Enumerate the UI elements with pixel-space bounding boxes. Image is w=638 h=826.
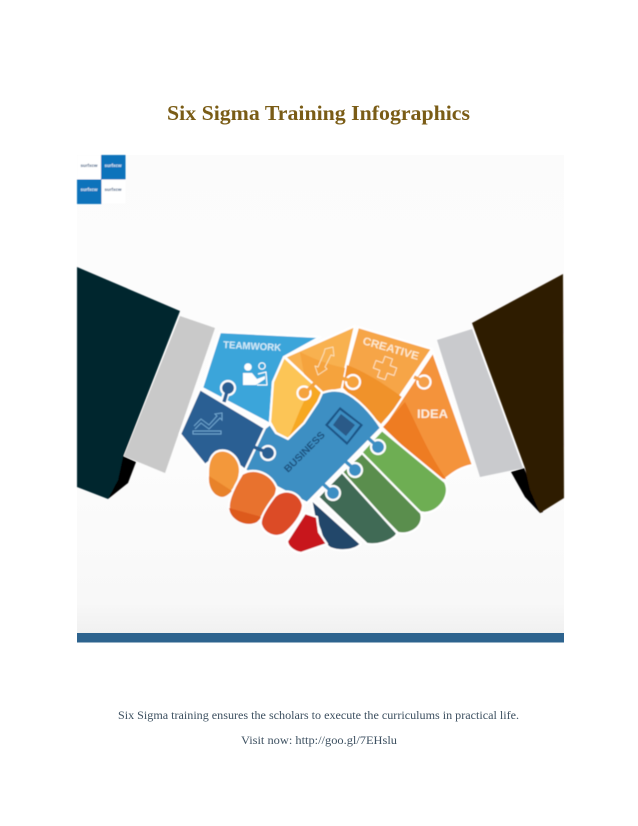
panel: handshake image [77,155,564,642]
finger: orange [208,450,240,497]
bottom bar [77,633,564,642]
tabs: blue knobs in green fingers [323,438,385,500]
logo [77,155,126,204]
piece: creative: CREATIVE [361,335,420,363]
icon: arrows [315,347,334,375]
right sleeve [437,274,564,513]
piece: idea [383,352,473,480]
finger: red orange [261,491,303,536]
tab: arrows knob [298,382,316,400]
icon: document [325,407,363,445]
finger: red [287,513,327,553]
link text: Visit now: http://goo.gl/7EHslu [241,733,397,747]
piece: teamwork [202,332,320,424]
finger: orange red [229,471,277,524]
piece: business [245,391,381,503]
icon: two people [243,363,267,385]
piece: arrows orange [285,326,355,392]
tab: idea knob [414,376,430,388]
finger: navy [311,499,361,550]
logo: surfxcw [104,187,122,192]
piece: teamwork: TEAMWORK [223,340,282,354]
image background [77,155,564,642]
left sleeve [77,267,215,499]
finger: light green [358,430,447,513]
logo: surfxcw [80,187,98,192]
title: Six Sigma Training Infographics [167,101,470,125]
tab: chart knob in business [254,446,275,460]
piece: idea: IDEA [417,409,448,421]
piece: chart [180,381,265,470]
tab: creative arrows knob [341,375,360,389]
icon: plus [371,354,399,382]
puzzle handshake [180,326,473,553]
icon: growth chart [193,413,222,434]
logo: surfxcw [104,163,122,168]
body text: Six Sigma training ensures the scholars to execute the curriculums in practical life. [118,708,519,722]
finger: dark green [318,472,397,544]
piece: business: BUSINESS [282,430,328,475]
logo: surfxcw [80,163,98,168]
finger: mid green [340,453,422,533]
piece: yellow [270,357,322,439]
tab: chart knob [221,381,235,402]
piece: creative [342,327,432,424]
